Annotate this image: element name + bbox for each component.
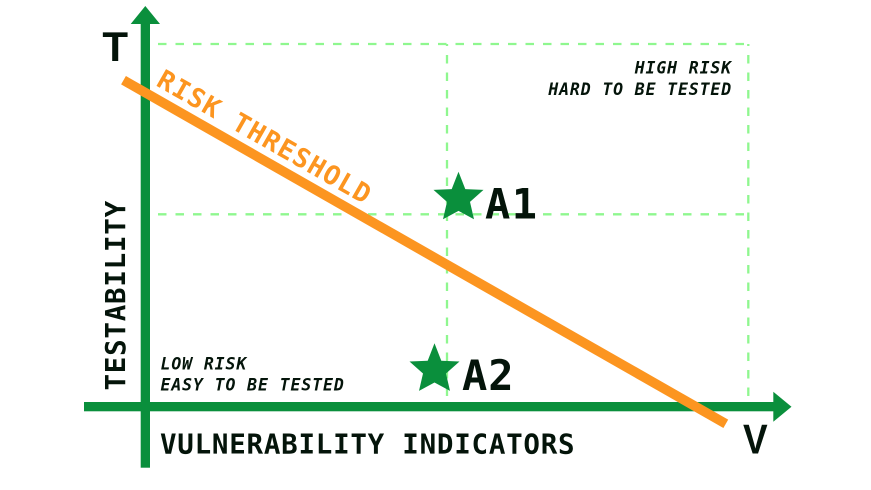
high risk note: HIGH RISK <box>634 58 733 77</box>
high risk note: HARD TO BE TESTED <box>547 80 732 99</box>
high risk note <box>547 58 733 99</box>
y axis arrow <box>131 6 160 468</box>
x axis arrow <box>84 392 792 422</box>
x axis title: VULNERABILITY INDICATORS <box>160 428 575 460</box>
star A1 <box>434 172 484 219</box>
y axis title: TESTABILITY <box>100 200 132 390</box>
label A1: A1 <box>485 179 539 228</box>
low risk note: EASY TO BE TESTED <box>160 376 345 395</box>
low risk note <box>160 354 345 395</box>
risk threshold line <box>124 80 726 424</box>
risk threshold label: RISK THRESHOLD <box>152 64 377 211</box>
star A2 <box>410 343 460 391</box>
axis letter V: V <box>743 416 768 463</box>
label A2: A2 <box>462 351 515 400</box>
axis letter T: T <box>102 23 128 70</box>
low risk note: LOW RISK <box>160 354 248 373</box>
